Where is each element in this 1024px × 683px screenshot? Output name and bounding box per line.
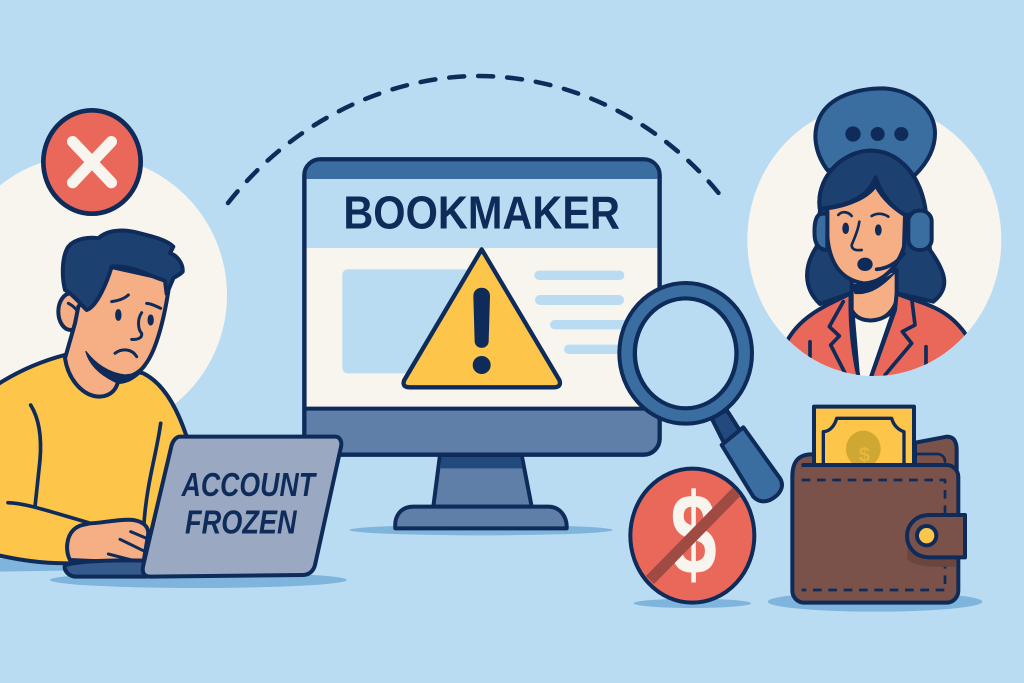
monitor body bbox=[304, 159, 660, 455]
panel: support agent bbox=[747, 88, 1001, 380]
monitor stand bbox=[395, 455, 567, 528]
laptop text: ACCOUNT FROZEN bbox=[181, 467, 317, 541]
face and neck bbox=[65, 267, 170, 397]
ear bbox=[58, 293, 83, 330]
heading: BOOKMAKER: BOOKMAKER bbox=[343, 186, 620, 238]
icon: crossed out dollar bbox=[630, 469, 754, 603]
icon: red X badge bbox=[43, 110, 141, 214]
hand bbox=[67, 520, 148, 563]
hair back bbox=[807, 151, 944, 304]
facial features bbox=[112, 295, 161, 357]
banknote: $ bbox=[859, 444, 871, 467]
icon: magnifying glass, no dollar, wallet bbox=[627, 291, 982, 612]
face bbox=[827, 185, 905, 283]
icon: warning triangle bbox=[404, 249, 560, 387]
icon: wallet bbox=[792, 407, 965, 603]
laptop keyboard bbox=[65, 560, 147, 577]
dashed arc bbox=[228, 76, 721, 203]
panel: cream circle behind man bbox=[0, 155, 227, 435]
laptop screen bbox=[143, 437, 341, 577]
wallet body bbox=[792, 465, 958, 603]
headset bbox=[814, 211, 932, 269]
lapels bbox=[810, 298, 926, 375]
jaw shadow bbox=[86, 352, 140, 383]
hair top bbox=[819, 151, 926, 215]
cream circle bbox=[747, 104, 1001, 376]
icon: magnifying glass bbox=[627, 291, 782, 501]
man with laptop bbox=[0, 231, 347, 588]
sweater folds bbox=[8, 405, 161, 523]
page placeholder content bbox=[342, 269, 637, 373]
agent figure bbox=[787, 151, 968, 380]
laptop text: ACCOUNT FROZEN: FROZEN bbox=[185, 504, 297, 541]
desk shadow bbox=[0, 558, 347, 588]
monitor bbox=[304, 159, 660, 535]
banknote bbox=[814, 407, 914, 468]
dollar sign: $ bbox=[670, 471, 717, 599]
hair bbox=[63, 231, 183, 310]
neck bbox=[852, 270, 897, 322]
shadow under wallet bbox=[768, 592, 982, 612]
chin shadow bbox=[852, 272, 896, 293]
blazer bbox=[787, 293, 859, 380]
monitor shadow bbox=[349, 525, 613, 535]
laptop text: ACCOUNT FROZEN: ACCOUNT bbox=[181, 467, 317, 504]
shadow under coin bbox=[634, 599, 751, 608]
agent facial features bbox=[838, 212, 888, 270]
wallet clasp bbox=[907, 537, 956, 567]
shirt bbox=[852, 313, 892, 376]
sweater bbox=[0, 355, 187, 563]
illustration scene bbox=[0, 74, 1002, 612]
speech bubble bbox=[815, 88, 935, 175]
